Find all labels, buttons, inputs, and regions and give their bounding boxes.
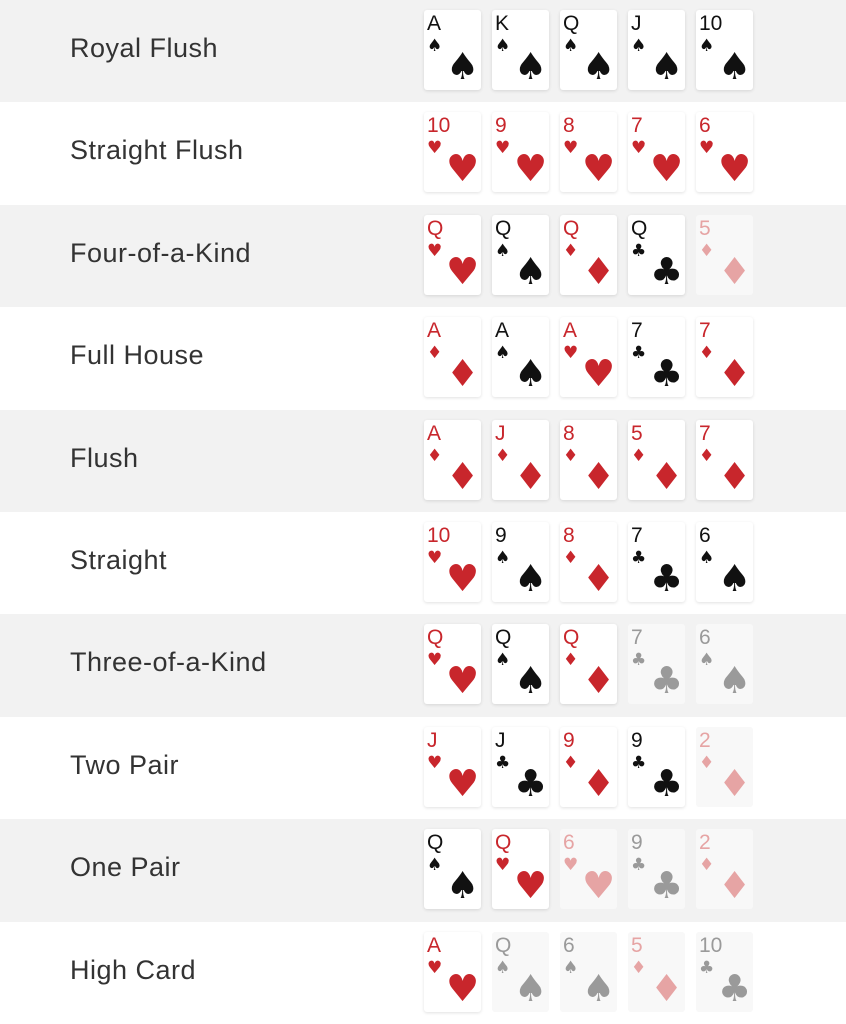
cards: 7 (699, 422, 711, 445)
cards: Q (427, 831, 443, 854)
cards: ♦ (582, 762, 615, 805)
cards: J (495, 422, 506, 445)
cards: 9 (631, 729, 643, 752)
cards (423, 829, 751, 911)
cards: ♦ (718, 250, 751, 293)
cards: 7 (631, 114, 643, 137)
cards (423, 624, 751, 706)
label: Straight (70, 545, 167, 575)
cards: ♦ (563, 548, 578, 568)
cards: ♣ (650, 352, 683, 395)
cards: ♠ (718, 45, 751, 88)
row: four of a kind (0, 205, 846, 307)
cards: ♥ (427, 753, 442, 773)
cards: 9 (495, 114, 507, 137)
label: Four-of-a-Kind (70, 238, 251, 268)
label: One Pair (70, 852, 181, 882)
row: straight flush (70, 114, 754, 194)
cards: ♣ (631, 241, 646, 261)
cards: ♣ (650, 864, 683, 907)
label: Three-of-a-Kind (70, 647, 267, 677)
cards: 10 (427, 114, 450, 137)
cards: ♦ (631, 446, 646, 466)
cards: ♦ (699, 343, 714, 363)
label: Flush (70, 443, 139, 473)
cards: ♦ (582, 250, 615, 293)
cards: ♦ (718, 455, 751, 498)
cards: ♥ (718, 147, 751, 190)
cards: ♠ (514, 352, 547, 395)
cards: Q (563, 626, 579, 649)
cards (423, 934, 751, 1014)
cards: 7 (631, 524, 643, 547)
cards: J (427, 729, 438, 752)
cards: ♦ (582, 557, 615, 600)
cards: 7 (699, 319, 711, 342)
cards (423, 114, 754, 194)
label: Straight Flush (70, 135, 244, 165)
cards: ♠ (427, 855, 442, 875)
cards: ♠ (718, 557, 751, 600)
label: High Card (70, 955, 196, 985)
cards: ♠ (514, 250, 547, 293)
cards: 6 (699, 114, 711, 137)
row: flush (0, 410, 846, 512)
row: royal flush (0, 0, 846, 102)
cards: ♠ (495, 958, 510, 978)
cards: ♥ (446, 557, 479, 600)
cards: ♦ (699, 446, 714, 466)
cards: ♣ (718, 967, 751, 1010)
cards: ♠ (514, 45, 547, 88)
cards: ♠ (514, 557, 547, 600)
cards: ♦ (563, 650, 578, 670)
cards: ♠ (495, 241, 510, 261)
cards: ♥ (446, 147, 479, 190)
cards: Q (631, 217, 647, 240)
cards: Q (563, 12, 579, 35)
cards: Q (495, 831, 511, 854)
cards: ♦ (631, 958, 646, 978)
cards: ♥ (427, 241, 442, 261)
cards: ♥ (514, 147, 547, 190)
cards: ♥ (495, 855, 510, 875)
cards: ♣ (631, 753, 646, 773)
cards: ♦ (582, 455, 615, 498)
cards: 5 (631, 934, 643, 957)
label: Two Pair (70, 750, 179, 780)
cards: 6 (699, 524, 711, 547)
cards: 6 (699, 626, 711, 649)
cards: ♠ (718, 659, 751, 702)
cards: ♦ (427, 446, 442, 466)
cards: Q (427, 626, 443, 649)
cards: Q (495, 934, 511, 957)
cards: ♠ (631, 36, 646, 56)
cards: ♠ (650, 45, 683, 88)
row: high card (70, 934, 751, 1014)
cards: 6 (563, 934, 575, 957)
cards: ♦ (650, 967, 683, 1010)
cards: ♠ (582, 45, 615, 88)
row: three of a kind (0, 614, 846, 717)
cards: ♦ (718, 762, 751, 805)
cards (423, 10, 754, 92)
cards: ♣ (631, 548, 646, 568)
cards: 8 (563, 114, 575, 137)
cards (423, 319, 754, 399)
cards: ♠ (427, 36, 442, 56)
row: straight (70, 524, 754, 604)
row: one pair (0, 819, 846, 922)
cards: ♣ (631, 343, 646, 363)
cards: ♠ (514, 967, 547, 1010)
cards: ♦ (650, 455, 683, 498)
cards: 8 (563, 524, 575, 547)
cards: 9 (495, 524, 507, 547)
cards: ♠ (446, 45, 479, 88)
cards: 5 (631, 422, 643, 445)
cards: 9 (563, 729, 575, 752)
cards: Q (563, 217, 579, 240)
cards: ♠ (495, 548, 510, 568)
cards: ♥ (427, 138, 442, 158)
cards: K (495, 12, 509, 35)
cards: A (495, 319, 509, 342)
cards: A (427, 934, 441, 957)
cards (423, 729, 751, 809)
cards: ♦ (563, 753, 578, 773)
cards: 2 (699, 729, 711, 752)
cards: ♣ (650, 659, 683, 702)
cards: ♠ (582, 967, 615, 1010)
cards: ♣ (495, 753, 510, 773)
cards: ♠ (495, 36, 510, 56)
cards: ♥ (631, 138, 646, 158)
cards: ♥ (563, 343, 578, 363)
cards: ♦ (718, 352, 751, 395)
row: two pair (70, 729, 751, 809)
cards: ♦ (699, 855, 714, 875)
cards: ♠ (563, 36, 578, 56)
cards: 7 (631, 626, 643, 649)
cards (423, 420, 754, 502)
cards: ♦ (446, 455, 479, 498)
cards: ♠ (563, 958, 578, 978)
cards: ♦ (446, 352, 479, 395)
cards: 8 (563, 422, 575, 445)
cards: ♠ (514, 659, 547, 702)
cards: ♣ (650, 762, 683, 805)
cards: ♣ (699, 958, 714, 978)
cards: ♥ (446, 250, 479, 293)
cards: ♦ (514, 455, 547, 498)
cards: ♦ (699, 241, 714, 261)
cards: ♠ (495, 343, 510, 363)
cards (423, 524, 754, 604)
cards: 2 (699, 831, 711, 854)
cards: ♥ (427, 650, 442, 670)
label: Royal Flush (70, 33, 218, 63)
cards: ♦ (699, 753, 714, 773)
cards: 10 (427, 524, 450, 547)
cards: Q (495, 626, 511, 649)
cards: ♦ (563, 241, 578, 261)
cards: ♥ (446, 762, 479, 805)
cards: ♦ (718, 864, 751, 907)
cards: ♦ (582, 659, 615, 702)
cards: ♥ (446, 659, 479, 702)
cards: J (495, 729, 506, 752)
cards: ♣ (631, 650, 646, 670)
cards: A (563, 319, 577, 342)
cards: A (427, 319, 441, 342)
cards (423, 215, 751, 297)
cards: 7 (631, 319, 643, 342)
cards: A (427, 12, 441, 35)
cards: ♣ (514, 762, 547, 805)
cards: A (427, 422, 441, 445)
cards: 5 (699, 217, 711, 240)
cards: ♥ (427, 548, 442, 568)
cards: ♥ (582, 147, 615, 190)
cards: Q (495, 217, 511, 240)
cards: ♥ (514, 864, 547, 907)
cards: ♠ (699, 650, 714, 670)
cards: ♠ (699, 548, 714, 568)
cards: ♥ (563, 138, 578, 158)
cards: ♥ (446, 967, 479, 1010)
cards: ♦ (495, 446, 510, 466)
cards: ♥ (582, 352, 615, 395)
cards: ♣ (631, 855, 646, 875)
row: full house (70, 319, 754, 399)
cards: Q (427, 217, 443, 240)
cards: 10 (699, 12, 722, 35)
cards: 10 (699, 934, 722, 957)
cards: ♠ (699, 36, 714, 56)
cards: 6 (563, 831, 575, 854)
cards: ♥ (582, 864, 615, 907)
cards: ♣ (650, 557, 683, 600)
cards: ♥ (563, 855, 578, 875)
cards: 9 (631, 831, 643, 854)
cards: ♥ (495, 138, 510, 158)
cards: ♥ (650, 147, 683, 190)
cards: J (631, 12, 642, 35)
cards: ♥ (427, 958, 442, 978)
cards: ♥ (699, 138, 714, 158)
cards: ♦ (427, 343, 442, 363)
label: Full House (70, 340, 204, 370)
cards: ♦ (563, 446, 578, 466)
cards: ♠ (495, 650, 510, 670)
cards: ♠ (446, 864, 479, 907)
cards: ♣ (650, 250, 683, 293)
